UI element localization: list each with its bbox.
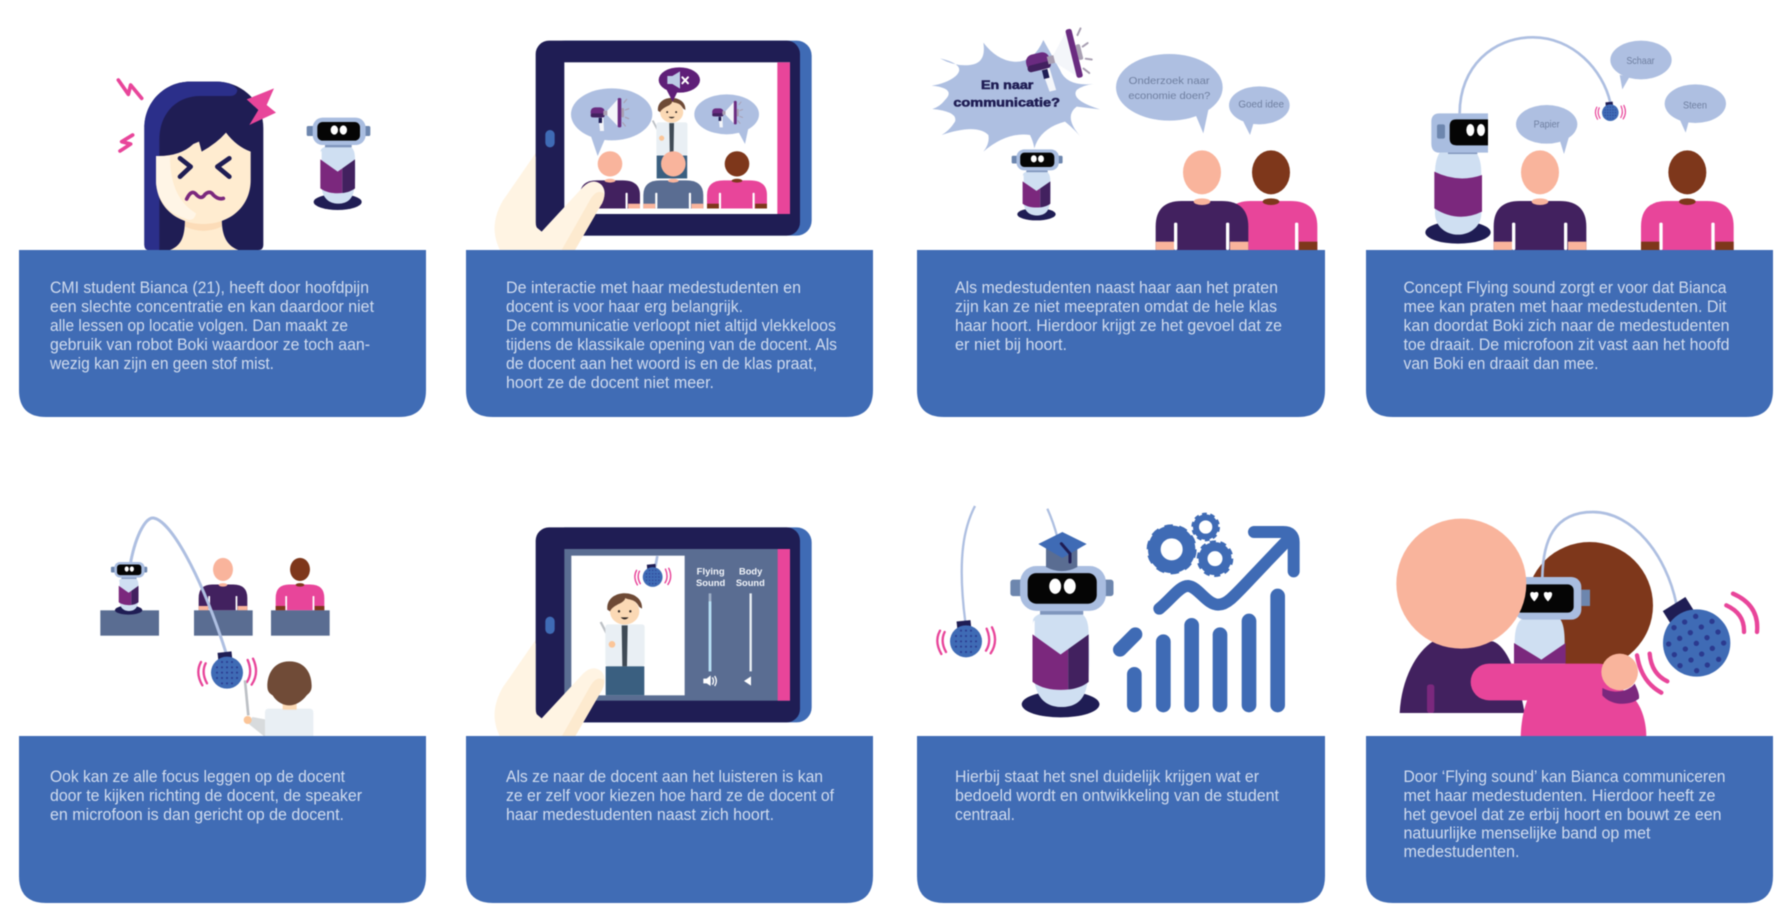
body text — [506, 768, 834, 824]
illustration: tablet with teacher and volume sliders: Body — [739, 567, 762, 577]
body text: wezig kan zijn en geen stof mist. — [49, 355, 274, 373]
body text: en microfoon is dan gericht op de docent. — [50, 806, 344, 824]
body text: een slechte concentratie en kan daardoor niet — [50, 298, 374, 316]
text panel — [917, 250, 1325, 417]
illustration: tablet with teacher and volume sliders: Sound — [696, 578, 725, 588]
body text: Als ze naar de docent aan het luisteren is kan — [506, 768, 823, 786]
body text: haar medestudenten naast zich hoort. — [506, 806, 774, 824]
illustration: tablet with teacher and volume sliders: Flying — [697, 567, 725, 577]
body text: Concept Flying sound zorgt er voor dat Bianca — [1404, 279, 1726, 297]
body text: door te kijken richting de docent, de speaker — [50, 787, 363, 805]
body text: Ook kan ze alle focus leggen op de docent — [50, 768, 345, 786]
body text: met haar medestudenten. Hierdoor heeft ze — [1404, 787, 1716, 805]
illustration: tablet with teacher and volume sliders: Sound — [736, 578, 765, 588]
text panel — [1366, 736, 1773, 903]
body text — [49, 279, 374, 373]
body text: De interactie met haar medestudenten en — [506, 279, 801, 297]
card 5: focus on teacher — [19, 518, 426, 903]
body text: Hierbij staat het snel duidelijk krijgen wat er — [955, 768, 1260, 786]
illustration: robot shout burst and two students: economie doen? — [1128, 91, 1211, 102]
body text: ze er zelf voor kiezen hoe hard ze de docent of — [506, 787, 834, 805]
illustration: robot shout burst and two students: En naar — [981, 78, 1034, 92]
body text: centraal. — [955, 806, 1015, 824]
card 7: development — [917, 506, 1325, 903]
text panel — [917, 736, 1325, 903]
illustration: graduate robot, microphone, gears and rising chart — [937, 506, 1294, 717]
card 8: bond with students — [1366, 512, 1773, 903]
illustration: classroom desks, cable, microphone and teacher — [100, 518, 330, 739]
body text: gebruik van robot Boki waardoor ze toch aan- — [50, 336, 370, 354]
illustration: robot side view with microphone and students — [1425, 37, 1734, 250]
body text: Als medestudenten naast haar aan het praten — [955, 279, 1278, 297]
text panel — [19, 736, 426, 903]
illustration: tablet with teacher and volume sliders — [495, 527, 812, 737]
body text: hoort ze de docent niet meer. — [506, 374, 714, 392]
illustration: robot shout burst and two students: Goed idee — [1238, 99, 1284, 110]
illustration: robot side view with microphone and students: Papier — [1534, 119, 1560, 130]
body text: tijdens de klassikale opening van de docent. Als — [506, 336, 837, 354]
body text: het gevoel dat ze erbij hoort en bouwt ze een — [1404, 806, 1722, 824]
illustration: robot shout burst and two students: Onderzoek naar — [1129, 76, 1210, 87]
body text: bedoeld wordt en ontwikkeling van de student — [955, 787, 1279, 805]
card 1: Bianca headache — [19, 80, 426, 417]
illustration: robot side view with microphone and students: Schaar — [1626, 56, 1655, 67]
text panel — [1366, 250, 1773, 417]
text panel — [466, 736, 873, 903]
illustration: Bianca with headache and robot Boki — [118, 80, 370, 250]
body text — [1404, 279, 1730, 373]
body text: medestudenten. — [1404, 843, 1520, 861]
card 3: robot shouting — [917, 25, 1325, 417]
body text — [506, 279, 837, 392]
body text: toe draait. De microfoon zit vast aan het hoofd — [1404, 336, 1730, 354]
body text: zijn kan ze niet meepraten omdat de hele klas — [955, 298, 1277, 316]
body text: kan doordat Boki zich naar de medestudenten — [1404, 317, 1730, 335]
card 4: Flying sound concept — [1366, 37, 1773, 417]
body text: Door ‘Flying sound’ kan Bianca communiceren — [1404, 768, 1726, 786]
illustration: robot embraced by students with microphone — [1396, 512, 1757, 737]
body text: natuurlijke menselijke band op met — [1404, 824, 1651, 842]
illustration: robot side view with microphone and students: Steen — [1683, 100, 1707, 111]
body text: er niet bij hoort. — [955, 336, 1067, 354]
illustration: tablet showing teacher and talking students — [495, 41, 812, 250]
body text: de docent aan het woord is en de klas praat, — [506, 355, 817, 373]
body text: mee kan praten met haar medestudenten. Dit — [1404, 298, 1727, 316]
text panel — [19, 250, 426, 417]
body text — [1404, 768, 1726, 861]
body text: docent is voor haar erg belangrijk. — [506, 298, 743, 316]
body text: van Boki en draait dan mee. — [1404, 355, 1598, 373]
body text: CMI student Bianca (21), heeft door hoofdpijn — [50, 279, 369, 297]
body text: De communicatie verloopt niet altijd vlekkeloos — [506, 317, 836, 335]
body text — [50, 768, 363, 824]
body text — [955, 279, 1282, 354]
illustration: robot shout burst and two students — [932, 25, 1317, 250]
body text — [955, 768, 1279, 824]
illustration: robot shout burst and two students: communicatie? — [953, 96, 1060, 110]
text panel — [466, 250, 873, 417]
card 6: volume control tablet — [466, 527, 873, 903]
body text: haar hoort. Hierdoor krijgt ze het gevoel dat ze — [955, 317, 1282, 335]
body text: alle lessen op locatie volgen. Dan maakt ze — [50, 317, 348, 335]
card 2: tablet with class — [466, 41, 873, 417]
